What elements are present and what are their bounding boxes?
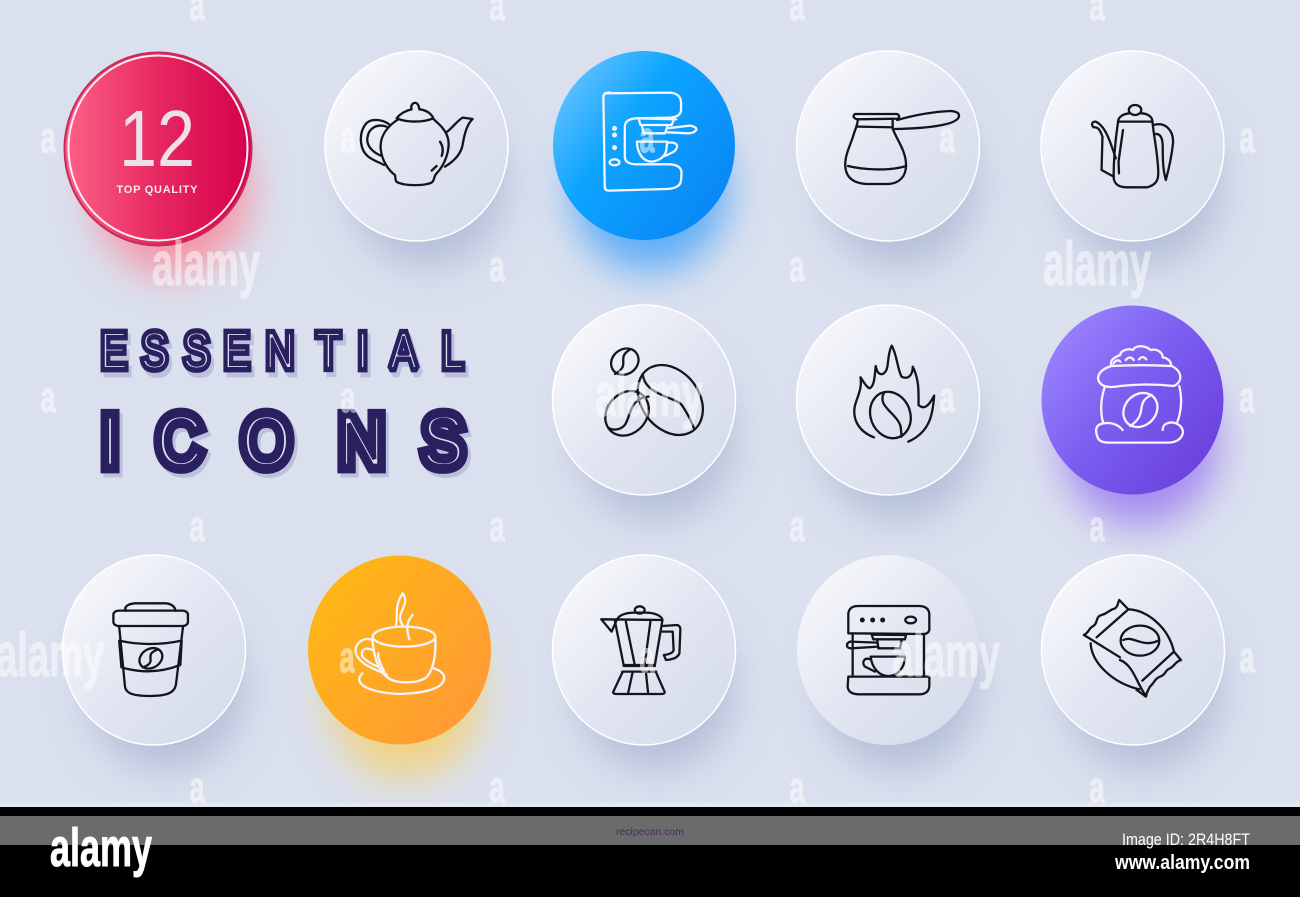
watermarks: a (1240, 373, 1255, 422)
watermarks: a (790, 763, 805, 812)
watermarks: a (940, 113, 955, 162)
icon: coffee pack (1042, 555, 1224, 770)
watermarks: a (40, 373, 56, 422)
watermarks: alamy (0, 621, 104, 690)
watermarks: a (340, 113, 356, 162)
watermarks: a (1090, 502, 1105, 551)
icon: purple coffee sack (1042, 306, 1224, 526)
footer bar: www.alamy.com (1114, 852, 1250, 874)
footer bar: Image ID: 2R4H8FT (1122, 830, 1250, 849)
icon: orange steaming cup (308, 556, 491, 778)
panel: badge 12 top quality: TOP QUALITY (116, 184, 198, 196)
icon: cezve (796, 51, 980, 266)
heading: essential icons: ESSENTIAL (100, 322, 464, 380)
heading: essential icons: ICONS (101, 402, 464, 482)
watermarks: alamy (1043, 230, 1151, 299)
footer bar (0, 803, 1300, 897)
panel: badge 12 top quality: 12 (119, 94, 195, 183)
watermarks: a (640, 113, 655, 162)
icon: moka pot (552, 555, 736, 770)
watermarks: a (340, 633, 355, 682)
watermarks: a (790, 242, 805, 291)
watermarks: a (940, 373, 955, 422)
icon: takeaway cup (62, 555, 246, 770)
watermarks: a (340, 373, 356, 422)
heading: essential icons (100, 322, 467, 486)
watermarks: a (640, 633, 655, 682)
heading: essential icons: ESSENTIAL (103, 327, 467, 385)
watermarks: alamy (892, 621, 1000, 690)
footer bar: recipecan.com (616, 826, 684, 838)
heading: essential icons: ICONS (101, 402, 464, 482)
watermarks: a (490, 242, 505, 291)
icon: coffee kettle (1041, 51, 1224, 266)
watermarks: alamy (152, 230, 260, 299)
watermarks: a (1240, 633, 1255, 682)
watermarks: a (490, 763, 505, 812)
icon: espresso machine (797, 555, 979, 770)
icon: blue espresso machine (553, 51, 735, 272)
watermarks: a (190, 502, 205, 551)
watermarks: a (790, 502, 805, 551)
icon: flame with bean (796, 305, 980, 520)
watermarks: a (490, 502, 505, 551)
watermarks: alamy (595, 361, 703, 430)
watermarks: a (40, 113, 56, 162)
watermarks: a (1090, 763, 1105, 812)
footer bar: alamy (50, 818, 152, 878)
icon: coffee beans (552, 305, 736, 520)
watermarks: a (190, 763, 205, 812)
heading: essential icons: ICONS (104, 406, 467, 486)
heading: essential icons: ESSENTIAL (100, 322, 464, 380)
icon: teapot (325, 51, 508, 266)
watermarks: a (1240, 113, 1255, 162)
panel: badge 12 top quality (64, 52, 252, 274)
